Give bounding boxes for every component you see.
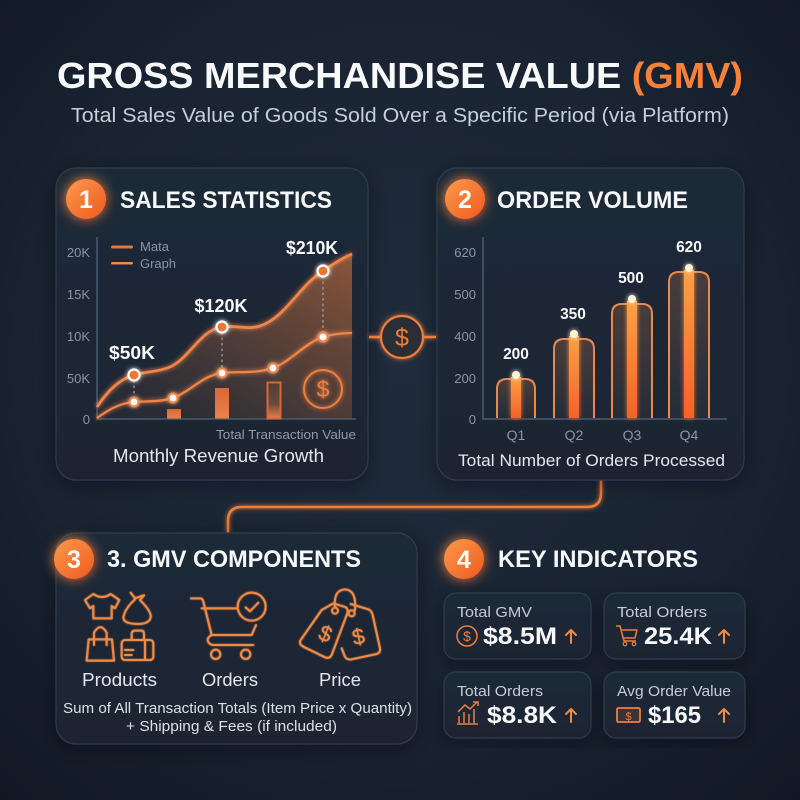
kpi: avg order value <box>604 672 745 738</box>
icon: shopping cart with check <box>191 593 266 659</box>
bar values <box>503 239 702 363</box>
bar Q1 <box>497 371 535 418</box>
quarter labels: Q3 <box>623 427 642 443</box>
y axis labels: 0 <box>83 412 90 427</box>
card 2 <box>437 168 744 480</box>
kpi: avg order value: $ <box>625 711 632 723</box>
kpi: total orders <box>604 593 745 659</box>
y axis labels: 50K <box>67 371 90 386</box>
y axis labels: 400 <box>454 329 476 344</box>
lower revenue line <box>97 333 352 418</box>
value labels: $210K <box>286 238 338 258</box>
quarter labels <box>507 427 699 443</box>
subtitle: Total Sales Value of Goods Sold Over a Specific Period (via Platform) <box>71 104 729 127</box>
chart caption: Total Number of Orders Processed <box>458 452 725 470</box>
legend <box>111 240 176 271</box>
icon: dollar coin <box>304 370 342 408</box>
connector: panel 1 to panel 2 with dollar <box>369 316 436 358</box>
bar values: 350 <box>560 306 586 323</box>
icon labels: Products <box>82 670 157 690</box>
lower points <box>130 332 328 406</box>
bar values: 620 <box>676 239 702 256</box>
formula text: + Shipping & Fees (if included) <box>126 718 337 735</box>
y axis labels <box>67 245 90 427</box>
value labels: $50K <box>109 343 155 363</box>
y axis labels: 620 <box>454 245 476 260</box>
formula text: Sum of All Transaction Totals (Item Price x Quantity) <box>63 700 412 717</box>
dotted drop lines <box>134 276 323 402</box>
kpi: total gmv: $ <box>463 628 471 644</box>
badge 1 <box>66 179 106 219</box>
quarter labels: Q2 <box>565 427 584 443</box>
quarter labels: Q4 <box>680 427 699 443</box>
area fill <box>97 254 352 419</box>
bar Q3 <box>612 295 652 418</box>
formula text <box>63 700 412 735</box>
kpi: total orders growth: Total Orders <box>457 683 543 700</box>
card 3 <box>56 533 417 744</box>
connector: panel 2 to panel 3 <box>228 480 601 533</box>
badge 3 <box>54 539 94 579</box>
bar Q2 <box>554 330 594 418</box>
heading: gmv components: 3. GMV COMPONENTS <box>107 546 361 573</box>
value labels <box>109 238 338 363</box>
icon labels: Price <box>319 670 361 690</box>
y axis labels: 200 <box>454 371 476 386</box>
bar values: 200 <box>503 346 529 363</box>
bar chart <box>454 237 727 443</box>
icon: dollar coin: $ <box>317 376 330 402</box>
panel: key indicators <box>444 539 745 738</box>
icon: price tags: $ <box>350 623 367 650</box>
small bars <box>167 382 280 418</box>
kpi: total orders: Total Orders <box>617 604 707 621</box>
bar Q4 <box>669 264 709 418</box>
axes <box>97 237 356 419</box>
badge 4: 4 <box>457 546 471 574</box>
title: GROSS MERCHANDISE VALUE (GMV) <box>57 55 743 96</box>
kpi: total orders growth: $8.8K <box>487 702 558 729</box>
kpi: total gmv <box>444 593 591 659</box>
bar values: 500 <box>618 270 644 287</box>
kpi: avg order value: Avg Order Value <box>617 683 731 700</box>
kpi: total orders: 25.4K <box>644 623 713 650</box>
kpi: total gmv: Total GMV <box>457 604 532 621</box>
y axis labels: 20K <box>67 245 90 260</box>
icon labels: Orders <box>202 670 258 690</box>
value labels: $120K <box>194 296 248 316</box>
connector: panel 1 to panel 2 with dollar: $ <box>395 324 409 352</box>
heading: order volume: ORDER VOLUME <box>497 187 688 214</box>
panel: gmv components <box>54 533 417 744</box>
icon: products <box>85 593 153 661</box>
y axis labels: 500 <box>454 287 476 302</box>
chart caption: Monthly Revenue Growth <box>113 446 324 466</box>
panel: order volume <box>437 168 744 480</box>
icon: price tags: $ <box>315 620 336 648</box>
legend: Graph <box>140 257 176 271</box>
axes <box>483 237 727 419</box>
legend: Mata <box>140 240 169 254</box>
y axis labels: 0 <box>469 412 476 427</box>
connector: panel 3 to panel 4 <box>417 637 444 639</box>
y axis labels: 15K <box>67 287 90 302</box>
badge 3: 3 <box>67 546 81 574</box>
upper revenue line <box>97 254 352 407</box>
axis caption: Total Transaction Value <box>216 428 356 442</box>
card 1 <box>56 168 368 480</box>
heading: sales statistics: SALES STATISTICS <box>120 187 332 214</box>
kpi: total orders growth <box>444 672 591 738</box>
kpi: total gmv: $8.5M <box>483 623 557 650</box>
kpi: avg order value: $165 <box>648 702 701 729</box>
y axis labels: 10K <box>67 329 90 344</box>
panel: sales statistics <box>56 168 368 480</box>
badge 2 <box>445 179 485 219</box>
quarter labels: Q1 <box>507 427 526 443</box>
heading: key indicators: KEY INDICATORS <box>498 546 698 573</box>
upper points <box>128 266 328 380</box>
badge 1: 1 <box>79 186 93 214</box>
badge 4 <box>444 539 484 579</box>
icon: price tags <box>300 589 380 659</box>
icon labels <box>82 670 361 690</box>
line chart <box>67 237 356 427</box>
badge 2: 2 <box>458 186 472 214</box>
y axis labels <box>454 245 476 427</box>
